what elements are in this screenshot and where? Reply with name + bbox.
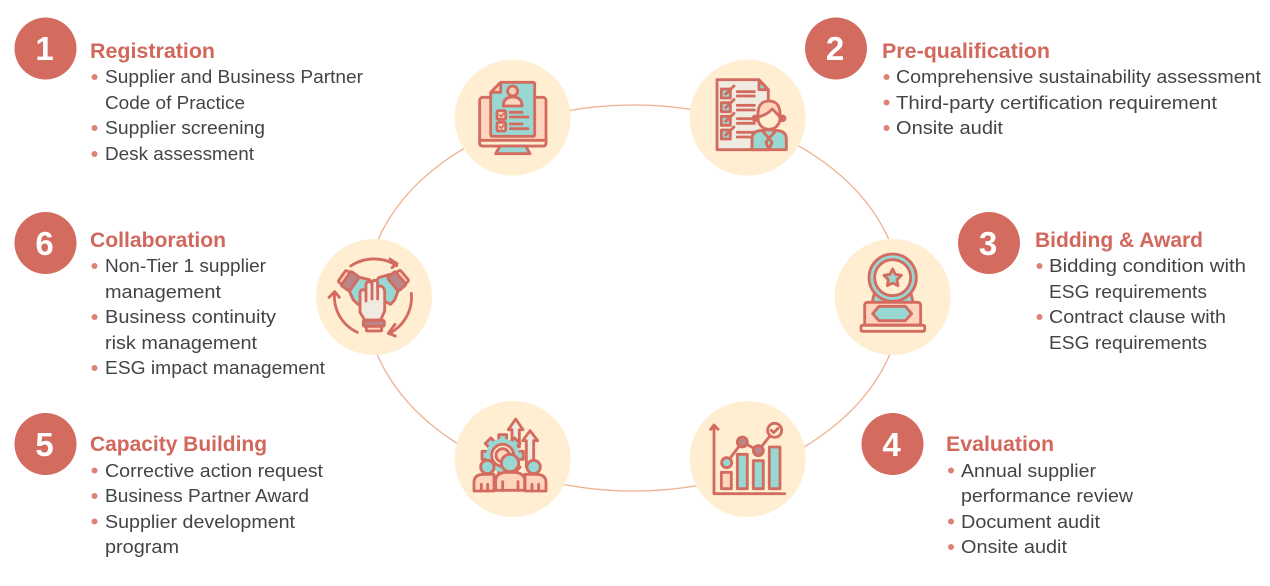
list: capacity building items: Supplier development [105,511,295,532]
number badge 6 [14,212,76,274]
list: evaluation items: performance review [961,485,1134,506]
list: pre-qualification items: Onsite audit [896,117,1003,138]
list: registration items: Desk assessment [105,143,254,164]
process cycle ring [366,105,902,491]
list: registration items: Code of Practice [105,92,245,113]
list: evaluation items [948,460,1134,557]
number badge 4: 4 [882,426,901,463]
list: collaboration items: Business continuity [105,306,277,327]
list: capacity building items [92,460,323,557]
list: bidding and award items: Bidding condition with [1049,255,1246,276]
list: bidding and award items [1036,255,1246,353]
heading: collaboration: Collaboration [90,229,226,252]
list: registration items: Supplier screening [105,117,265,138]
list: bidding and award items: ESG requirements [1049,281,1207,302]
icon: registration document on monitor [455,60,571,176]
list: capacity building items: Business Partner Award [105,485,309,506]
list: collaboration items: ESG impact management [105,357,325,378]
list: pre-qualification items [884,66,1261,138]
icon: trophy award [835,239,951,355]
list: pre-qualification items: Third-party certification requirement [896,92,1217,113]
list: pre-qualification items: Comprehensive sustainability assessment [896,66,1261,87]
heading: registration: Registration [90,40,215,63]
list: registration items [92,66,363,164]
panel: step 1 registration [14,18,363,164]
icon: collaboration hands [316,239,432,355]
heading: pre-qualification: Pre-qualification [882,40,1050,63]
list: collaboration items: risk management [105,332,257,353]
panel: step 2 pre-qualification [805,18,1261,138]
number badge 3 [958,212,1020,274]
list: evaluation items: Document audit [961,511,1100,532]
list: capacity building items: Corrective action request [105,460,323,481]
list: collaboration items: Non-Tier 1 supplier [105,255,266,276]
panel: step 3 bidding and award [958,212,1246,353]
list: collaboration items: management [105,281,221,302]
number badge 2: 2 [826,30,844,67]
list: collaboration items [92,255,325,378]
heading: capacity building: Capacity Building [90,433,267,456]
list: evaluation items: Onsite audit [961,536,1067,557]
number badge 2 [805,18,867,80]
list: evaluation items: Annual supplier [961,460,1096,481]
list: bidding and award items: ESG requirements [1049,332,1207,353]
number badge 6: 6 [35,225,54,262]
icon: pre-qualification checklist and person [690,60,806,176]
list: registration items: Supplier and Business Partner [105,66,363,87]
number badge 4 [862,413,924,475]
icon: capacity building team with gear and arrows [455,401,571,517]
icon: evaluation bar chart [690,401,806,517]
heading: evaluation: Evaluation [946,433,1054,456]
number badge 1: 1 [35,30,54,67]
list: bidding and award items: Contract clause with [1049,306,1226,327]
number badge 5: 5 [35,426,54,463]
panel: step 4 evaluation [862,413,1134,557]
panel: step 5 capacity building [14,413,323,557]
list: capacity building items: program [105,536,179,557]
number badge 1 [14,18,76,80]
number badge 5 [14,413,76,475]
panel: step 6 collaboration [14,212,325,378]
heading: bidding and award: Bidding & Award [1035,229,1203,252]
number badge 3: 3 [979,225,997,262]
